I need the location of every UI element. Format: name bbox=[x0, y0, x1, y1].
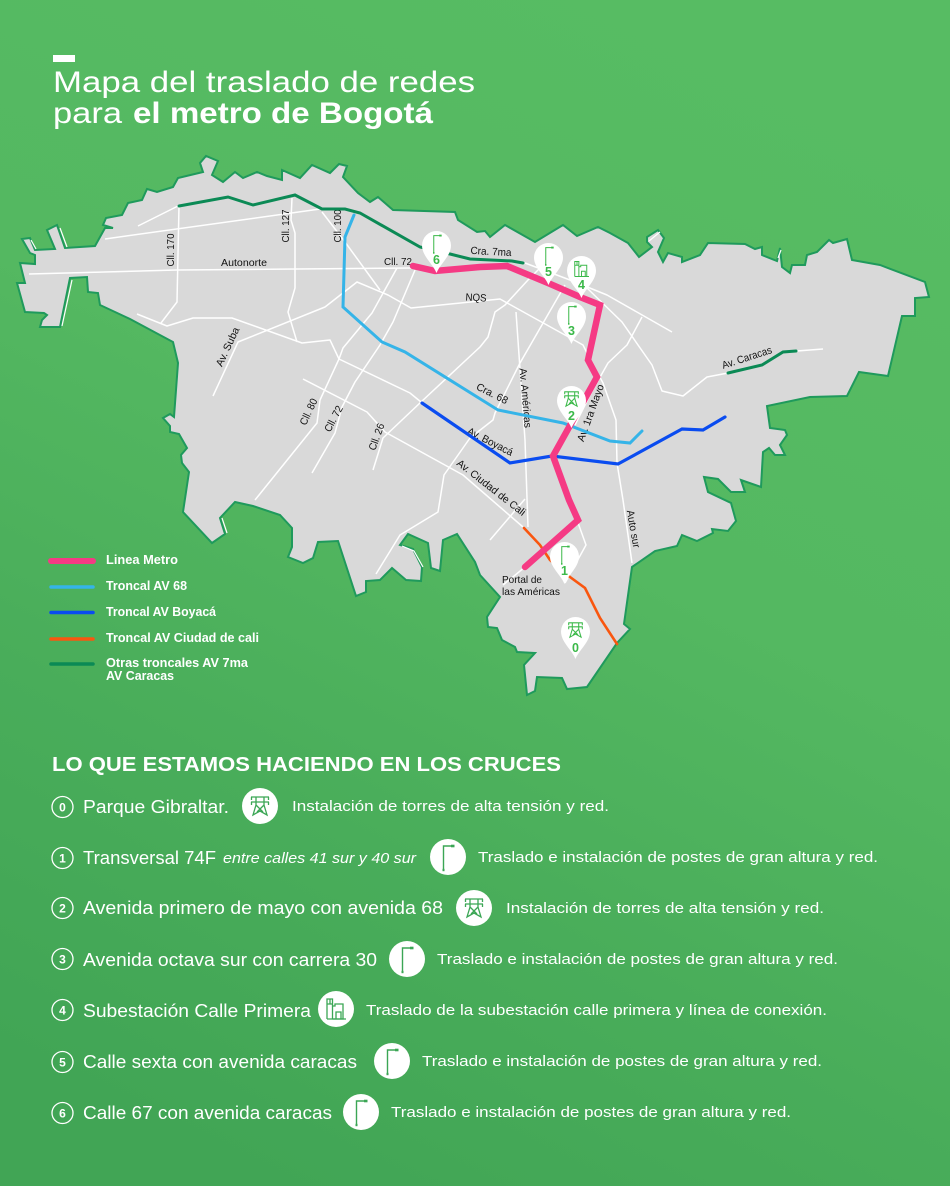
row 1: Traslado e instalación de postes de gran altura y red. bbox=[478, 849, 878, 866]
pin 4 bbox=[567, 256, 596, 298]
legend: troncal AV 68 bbox=[51, 579, 187, 593]
row 6 bbox=[52, 1094, 791, 1130]
row 1: Transversal 74F bbox=[83, 848, 216, 868]
title: el metro de Bogotá bbox=[133, 97, 433, 130]
route: troncal AV Ciudad de Cali bbox=[524, 528, 617, 644]
legend: otras troncales bbox=[51, 656, 249, 683]
street labels bbox=[165, 209, 774, 598]
street labels: Portal de bbox=[502, 574, 542, 586]
row 2: Avenida primero de mayo con avenida 68 bbox=[83, 898, 443, 918]
row 1: 1 bbox=[59, 851, 66, 865]
route: línea metro bbox=[413, 266, 600, 567]
street labels: Cll. 26 bbox=[367, 422, 387, 452]
street labels: NQS bbox=[465, 291, 487, 305]
title: para bbox=[53, 97, 122, 130]
street labels: Cll. 80 bbox=[298, 397, 320, 427]
row 4: 4 bbox=[59, 1003, 66, 1017]
row 1: entre calles 41 sur y 40 sur bbox=[223, 851, 417, 867]
legend: troncal AV Boyacá: Troncal AV Boyacá bbox=[106, 605, 216, 619]
street labels: Av. Caracas bbox=[720, 344, 774, 372]
legend: otras troncales: Otras troncales AV 7ma bbox=[106, 656, 249, 670]
row 2 bbox=[52, 890, 824, 926]
street labels: las Américas bbox=[502, 586, 560, 598]
row 4: Traslado de la subestación calle primera y línea de conexión. bbox=[366, 1002, 827, 1019]
row 4: Subestación Calle Primera bbox=[83, 1001, 312, 1021]
pin 0 bbox=[561, 617, 590, 659]
crossing list bbox=[52, 788, 878, 1130]
pin 1: 1 bbox=[561, 564, 568, 578]
street labels: Cra. 7ma bbox=[470, 245, 512, 259]
pin 6: 6 bbox=[433, 253, 440, 267]
row 6: Calle 67 con avenida caracas bbox=[83, 1103, 332, 1123]
row 5: Traslado e instalación de postes de gran altura y red. bbox=[422, 1053, 822, 1070]
map of Bogotá bbox=[17, 156, 929, 695]
legend: otras troncales: AV Caracas bbox=[106, 669, 174, 683]
street labels: Cra. 68 bbox=[474, 381, 510, 407]
street labels: Auto sur bbox=[624, 509, 642, 549]
street labels: Cll. 72 bbox=[322, 404, 346, 434]
row 0: Parque Gibraltar. bbox=[83, 797, 229, 817]
section heading: LO QUE ESTAMOS HACIENDO EN LOS CRUCES bbox=[52, 754, 561, 776]
street labels: Cll. 170 bbox=[165, 233, 177, 266]
pin 2: 2 bbox=[568, 409, 575, 423]
street labels: Av. Suba bbox=[214, 325, 242, 369]
route: troncal AV Boyacá bbox=[422, 403, 725, 464]
land shape bbox=[17, 156, 929, 695]
street labels: Cll. 72 bbox=[384, 256, 412, 268]
row 3: 3 bbox=[59, 952, 66, 966]
row 4 bbox=[52, 991, 827, 1027]
pin 1 bbox=[550, 542, 579, 584]
row 6: Traslado e instalación de postes de gran altura y red. bbox=[391, 1104, 791, 1121]
street labels: Av. 1ra Mayo bbox=[575, 383, 607, 443]
pin 3 bbox=[557, 302, 586, 344]
row 3: Traslado e instalación de postes de gran altura y red. bbox=[437, 951, 838, 968]
street labels: Autonorte bbox=[221, 257, 267, 269]
row 0 bbox=[52, 788, 609, 824]
legend: linea metro bbox=[51, 553, 178, 567]
row 1 bbox=[52, 839, 878, 875]
row 5: Calle sexta con avenida caracas bbox=[83, 1052, 357, 1072]
pin 5 bbox=[534, 243, 563, 285]
legend: linea metro: Linea Metro bbox=[106, 553, 178, 567]
row 3: Avenida octava sur con carrera 30 bbox=[83, 950, 377, 970]
route: troncal AV 68 bbox=[343, 215, 642, 443]
row 5 bbox=[52, 1043, 822, 1079]
row 3 bbox=[52, 941, 838, 977]
row 0: Instalación de torres de alta tensión y red. bbox=[292, 798, 609, 815]
row 0: 0 bbox=[59, 800, 66, 814]
street labels: Av. Ciudad de Cali bbox=[454, 457, 528, 519]
street labels: Cll. 100 bbox=[332, 209, 344, 242]
row 2: 2 bbox=[59, 901, 66, 915]
pin 4: 4 bbox=[578, 278, 585, 292]
legend bbox=[51, 553, 259, 683]
pin 2 bbox=[557, 386, 586, 428]
street labels: Av. Américas bbox=[516, 368, 534, 428]
street labels: Av. Boyacá bbox=[465, 425, 515, 459]
street labels: Cll. 127 bbox=[280, 209, 292, 242]
legend: troncal AV 68: Troncal AV 68 bbox=[106, 579, 187, 593]
row 6: 6 bbox=[59, 1106, 66, 1120]
title bbox=[53, 55, 475, 130]
pin 6 bbox=[422, 231, 451, 273]
legend: troncal AV Ciudad de cali: Troncal AV Ciudad de cali bbox=[106, 631, 259, 645]
row 2: Instalación de torres de alta tensión y red. bbox=[506, 900, 824, 917]
title: Mapa del traslado de redes bbox=[53, 66, 475, 99]
road network bbox=[29, 198, 823, 585]
route: otras troncales bbox=[179, 195, 796, 373]
row 5: 5 bbox=[59, 1055, 66, 1069]
pin 3: 3 bbox=[568, 324, 575, 338]
pin 5: 5 bbox=[545, 265, 552, 279]
pin 0: 0 bbox=[572, 641, 579, 655]
